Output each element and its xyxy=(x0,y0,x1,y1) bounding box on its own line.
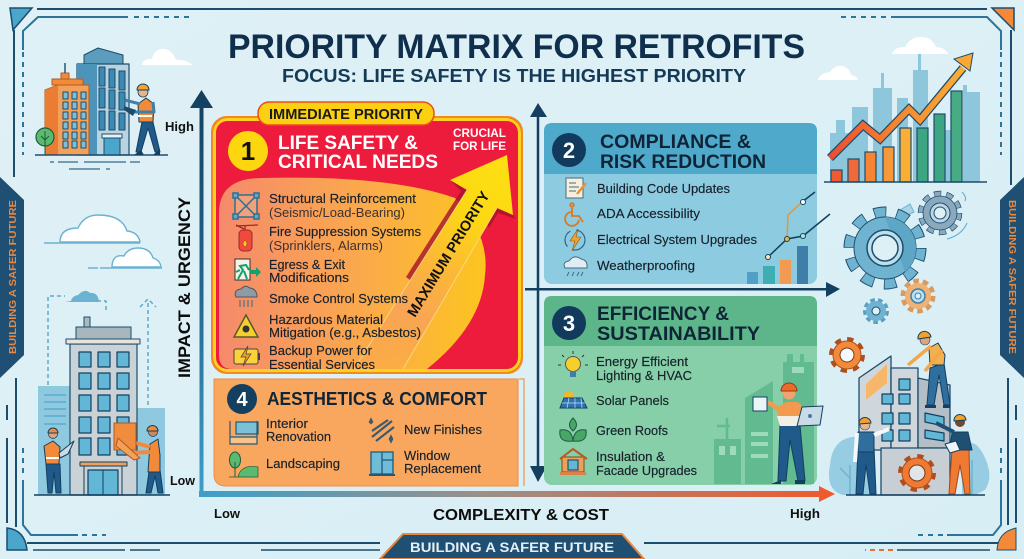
number 2 xyxy=(552,133,586,167)
item: ada: ADA Accessibility xyxy=(597,207,701,221)
number 3: 3 xyxy=(563,311,575,336)
illustration: growth chart xyxy=(824,52,987,182)
item: backup power: Backup Power for xyxy=(269,344,372,358)
number 1: 1 xyxy=(241,136,255,166)
icon: solar xyxy=(560,391,587,408)
cloud: top left xyxy=(142,49,193,65)
bottom banner xyxy=(380,534,644,559)
arrow: maximum priority: MAXIMUM PRIORITY xyxy=(405,189,494,320)
illustration: engineer with laptop xyxy=(753,383,823,484)
corner: top left xyxy=(10,8,32,30)
icon: leaves xyxy=(560,418,586,441)
center horizontal arrow xyxy=(525,282,840,297)
icon: landscaping xyxy=(229,452,258,477)
panel 1: life safety xyxy=(212,102,522,373)
item: egress: Modifications xyxy=(269,271,349,285)
item: smoke control: Smoke Control Systems xyxy=(269,292,408,306)
crucial for life: FOR LIFE xyxy=(453,139,506,153)
small blue gear xyxy=(865,300,887,322)
mini chart xyxy=(747,192,830,284)
corner: bottom left xyxy=(7,528,27,550)
heading: COMPLIANCE & xyxy=(600,131,751,153)
illustration: city buildings and inspector xyxy=(35,48,168,169)
icon: document xyxy=(566,178,586,198)
heading: SUSTAINABILITY xyxy=(597,323,760,345)
icon: house xyxy=(560,449,587,475)
item: interior: Interior xyxy=(266,417,308,431)
background city xyxy=(714,354,814,484)
item: backup power: Essential Services xyxy=(269,358,375,372)
icon: exit xyxy=(235,259,261,280)
y axis label: IMPACT & URGENCY xyxy=(175,196,194,378)
item: insulation: Insulation & xyxy=(596,450,666,464)
item: new finishes: New Finishes xyxy=(404,423,482,437)
cloud: chart right xyxy=(892,37,948,54)
heading: CRITICAL NEEDS xyxy=(278,151,438,173)
item: building code: Building Code Updates xyxy=(597,182,730,196)
illustration: office tower and workers xyxy=(34,291,170,495)
center vertical arrow xyxy=(537,115,539,470)
heading: EFFICIENCY & xyxy=(597,303,729,325)
icon: structural frame xyxy=(233,193,259,219)
item: egress xyxy=(269,258,349,285)
inner gradient panel xyxy=(219,178,486,369)
item: hazardous xyxy=(269,313,421,340)
icon: smoke cloud xyxy=(235,286,257,307)
icon: accessibility xyxy=(565,203,583,226)
illustration: construction team xyxy=(829,331,989,495)
skyline xyxy=(830,52,980,182)
item: structural reinforcement xyxy=(269,192,417,220)
item: backup power xyxy=(269,344,375,372)
item: insulation: Facade Upgrades xyxy=(596,464,697,478)
item: structural reinforcement: Structural Reinforcement xyxy=(269,192,417,206)
side tab: left: BUILDING A SAFER FUTURE xyxy=(7,200,19,354)
item: window: Window xyxy=(404,449,451,463)
x axis labels xyxy=(214,506,820,524)
bars xyxy=(831,91,962,182)
panel 2 header xyxy=(544,123,817,174)
item: hazardous: Mitigation (e.g., Asbestos) xyxy=(269,326,421,340)
x axis arrow xyxy=(199,486,835,502)
item: electrical: Electrical System Upgrades xyxy=(597,233,757,247)
item: energy: Lighting & HVAC xyxy=(596,369,692,383)
item: hazardous: Hazardous Material xyxy=(269,313,383,327)
side tab: left xyxy=(0,177,24,378)
orange gear xyxy=(832,340,862,370)
icon: extinguisher xyxy=(236,225,258,251)
bottom banner: BUILDING A SAFER FUTURE xyxy=(410,539,614,555)
heading xyxy=(278,132,438,173)
cloud: left middle xyxy=(44,215,162,268)
item: green roofs: Green Roofs xyxy=(596,424,668,438)
crucial for life: CRUCIAL xyxy=(453,126,506,140)
heading: AESTHETICS & COMFORT xyxy=(267,389,487,409)
item: weatherproofing: Weatherproofing xyxy=(597,259,695,273)
heading: LIFE SAFETY & xyxy=(278,132,418,154)
item: replacement: Replacement xyxy=(404,462,482,476)
icon: bulb xyxy=(558,351,588,377)
corner: bottom right xyxy=(997,528,1016,550)
number 4: 4 xyxy=(236,389,248,411)
badge: immediate priority xyxy=(258,102,434,125)
medium gear xyxy=(921,192,967,239)
title: PRIORITY MATRIX FOR RETROFITS xyxy=(228,28,805,66)
panel 3 header xyxy=(544,296,817,346)
corner: top right xyxy=(992,8,1014,30)
big gear xyxy=(850,204,920,283)
x axis labels: Low xyxy=(214,506,241,521)
icon: window xyxy=(369,452,395,475)
item: fire suppression: (Sprinklers, Alarms) xyxy=(269,239,383,253)
panel 2: compliance xyxy=(544,123,830,284)
item: landscaping: Landscaping xyxy=(266,457,340,471)
item: energy: Energy Efficient xyxy=(596,355,689,369)
number 4 xyxy=(227,384,257,414)
number 3 xyxy=(552,306,586,340)
heading xyxy=(600,131,766,173)
cloud: chart left xyxy=(818,66,858,80)
item: insulation xyxy=(596,450,697,478)
panel 3: efficiency xyxy=(544,296,823,485)
rising arrow xyxy=(830,53,973,158)
icon: finishes xyxy=(369,418,394,443)
icon: electrical xyxy=(565,229,585,251)
label: low: Low xyxy=(170,473,196,488)
x axis labels: COMPLEXITY & COST xyxy=(433,507,609,524)
x axis labels: High xyxy=(790,506,820,521)
tan gear xyxy=(903,281,933,311)
arrow: maximum priority xyxy=(354,155,516,369)
number 1 xyxy=(228,131,268,171)
item: fire suppression: Fire Suppression Systems xyxy=(269,225,421,239)
item: renovation: Renovation xyxy=(266,430,331,444)
heading: RISK REDUCTION xyxy=(600,151,766,173)
side tab: right: BUILDING A SAFER FUTURE xyxy=(1006,200,1018,354)
icon: weather xyxy=(564,257,587,276)
item: egress: Egress & Exit xyxy=(269,258,346,272)
item: structural reinforcement: (Seismic/Load-Bearing) xyxy=(269,206,405,220)
center vertical arrowheads xyxy=(530,103,547,482)
side tab: right xyxy=(1000,177,1024,378)
y axis arrow xyxy=(190,90,213,497)
badge: immediate priority: IMMEDIATE PRIORITY xyxy=(269,106,423,123)
panel 4: aesthetics and comfort xyxy=(214,379,524,486)
item: solar: Solar Panels xyxy=(596,394,669,408)
item: energy xyxy=(596,355,692,383)
icon: battery xyxy=(234,346,260,366)
label: high: High xyxy=(165,119,194,134)
subtitle: FOCUS: LIFE SAFETY IS THE HIGHEST PRIORITY xyxy=(282,66,746,86)
crucial for life xyxy=(453,126,506,153)
heading xyxy=(597,303,760,345)
icon: hazard xyxy=(234,315,258,337)
item: fire suppression xyxy=(269,225,421,253)
icon: bed xyxy=(230,421,258,444)
number 2: 2 xyxy=(563,138,575,163)
